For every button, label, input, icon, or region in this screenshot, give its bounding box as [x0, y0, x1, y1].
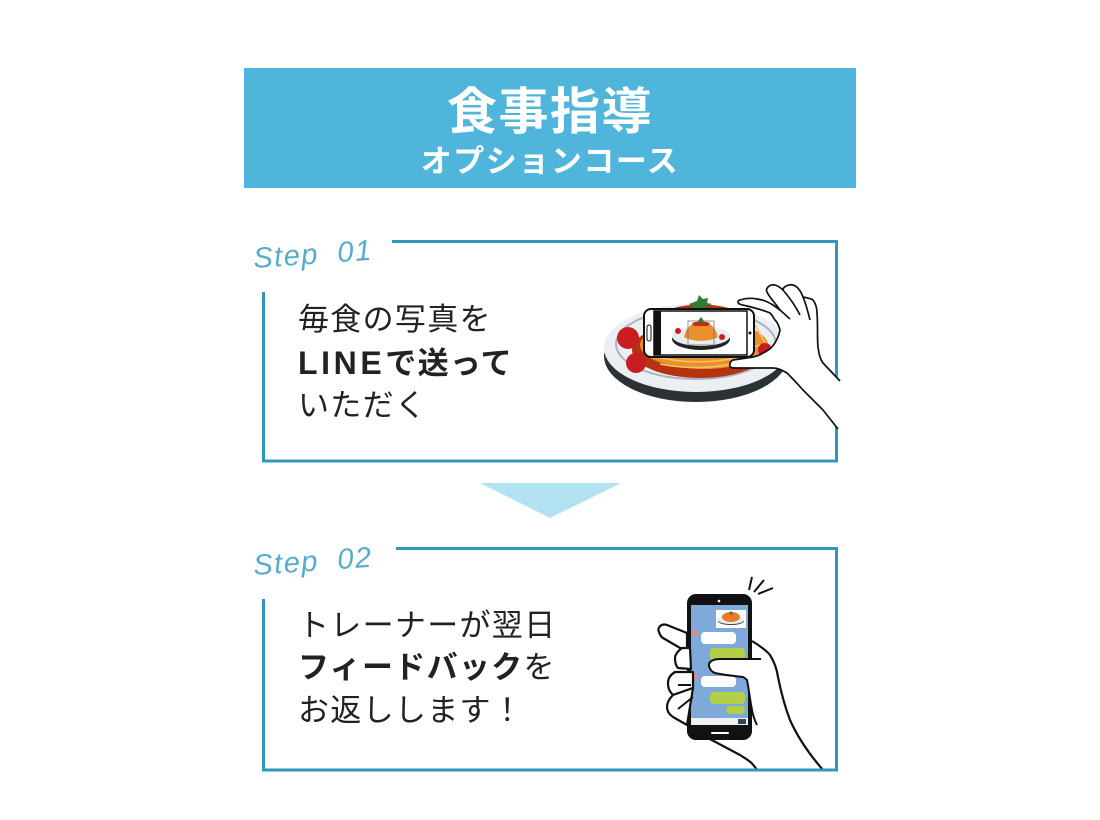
chat bubbles — [701, 632, 736, 644]
title banner: オプションコース — [421, 144, 679, 179]
notification lines — [749, 577, 773, 594]
step 01 text: いただく — [298, 388, 427, 423]
step 02 label: Step 02 — [252, 542, 374, 582]
step 02 text: お返しします！ — [298, 693, 524, 728]
title banner — [244, 68, 856, 188]
arrow — [480, 483, 621, 518]
step 01 text: 毎食の写真を — [298, 302, 492, 337]
step 01 text: で送って — [385, 346, 513, 381]
step 02 text: フィードバックを — [298, 650, 556, 685]
chat image — [716, 610, 746, 628]
tomatoes — [617, 327, 639, 349]
title banner: 食事指導 — [447, 84, 653, 140]
panel: step 01 — [252, 235, 840, 461]
step 02 text: トレーナーが翌日 — [298, 608, 556, 643]
phone body — [687, 594, 752, 740]
input bar — [691, 718, 748, 725]
panel frame 02 — [264, 548, 836, 770]
finger creases — [678, 685, 693, 709]
icon: photographing pasta with smartphone — [604, 285, 840, 430]
hand — [730, 285, 840, 430]
step 01 text: LINE — [298, 345, 385, 381]
pasta — [632, 322, 768, 378]
panel: step 02 — [252, 542, 836, 770]
icon: hand holding smartphone with chat — [658, 577, 823, 770]
camera phone — [644, 309, 754, 357]
plate — [604, 310, 788, 402]
thumb — [709, 659, 770, 725]
wrist — [708, 641, 823, 770]
fingers — [658, 625, 693, 725]
step 01 label: Step 01 — [252, 235, 374, 275]
panel frame 01 — [264, 242, 836, 461]
phone screen pasta — [672, 328, 730, 350]
